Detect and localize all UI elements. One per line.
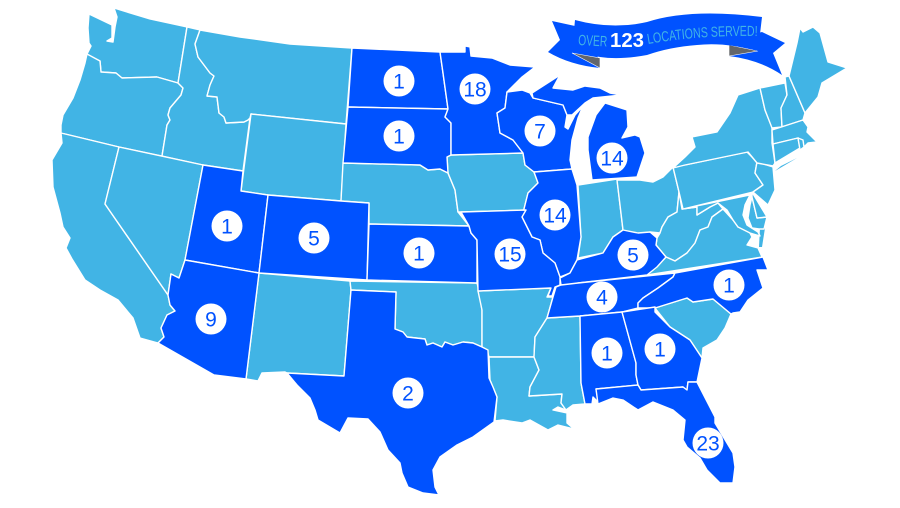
- state: Utah: [185, 165, 268, 273]
- state: New York: [673, 88, 775, 168]
- count: Utah: 1: [221, 216, 233, 238]
- state: Iowa: [447, 153, 538, 217]
- state: Massachusetts: [772, 120, 817, 147]
- count: Kansas: 1: [413, 242, 425, 266]
- state: West Virginia: [656, 192, 723, 261]
- count: Tennessee: [586, 282, 618, 312]
- banner main ribbon: [572, 13, 762, 58]
- state: Oklahoma: [350, 281, 482, 347]
- count: Illinois: 14: [543, 204, 567, 228]
- count: Georgia: [644, 334, 676, 364]
- state: Maine: [789, 27, 847, 113]
- state: Virginia: [647, 209, 763, 275]
- count: Utah: [212, 210, 242, 242]
- count: North Dakota: 1: [393, 70, 405, 94]
- banner text: LOCATIONS SERVED!: [647, 26, 757, 44]
- state: Virginia eastern shore: [759, 228, 765, 247]
- state: Illinois: [522, 169, 581, 277]
- count: Arizona: [196, 304, 226, 334]
- state: Louisiana: [489, 357, 574, 430]
- count: Kentucky: [618, 240, 648, 270]
- count: Missouri: 15: [498, 244, 522, 266]
- state: Nevada: [105, 147, 203, 295]
- state: Arkansas: [478, 288, 553, 357]
- state: North Dakota: [348, 48, 448, 109]
- state: California: [52, 133, 175, 343]
- state: Wyoming: [241, 114, 346, 201]
- count: Florida: 23: [696, 432, 720, 456]
- state: Tennessee: [547, 273, 675, 318]
- count: Minnesota: [460, 74, 490, 104]
- state: South Carolina: [655, 298, 731, 358]
- state: Washington: [87, 8, 187, 83]
- state: Vermont: [760, 83, 787, 128]
- state: Alabama: [580, 312, 638, 404]
- state: Georgia: [622, 307, 702, 390]
- state: Idaho: [162, 27, 250, 171]
- count: Alabama: [592, 338, 622, 368]
- banner right fold: [729, 45, 758, 56]
- state: North Carolina: [638, 257, 768, 314]
- banner right tail: [729, 32, 785, 75]
- state: Delaware: [752, 192, 767, 218]
- banner text: 123: [610, 30, 644, 52]
- state: Mississippi: [529, 316, 585, 410]
- banner text: [578, 26, 757, 52]
- count: Arizona: 9: [205, 308, 217, 332]
- count: Kentucky: 5: [627, 244, 639, 268]
- count: Colorado: 5: [308, 228, 320, 250]
- state: Indiana: [578, 179, 623, 258]
- state: Kansas: [367, 224, 477, 283]
- count: Kansas: [404, 238, 434, 268]
- state: New Mexico: [246, 273, 351, 381]
- state: New York, Long Island: [775, 158, 797, 171]
- state: Missouri: [461, 210, 560, 296]
- location counts: [196, 66, 744, 458]
- banner text: OVER: [578, 32, 608, 51]
- state: Connecticut: [773, 138, 800, 163]
- state: Wisconsin: [497, 90, 583, 172]
- state: Texas: [287, 290, 497, 495]
- count: Texas: [392, 378, 424, 408]
- ribbon banner: [548, 14, 785, 75]
- count: Illinois: [540, 200, 570, 230]
- count: Texas: 2: [402, 382, 414, 406]
- state: Pennsylvania: [673, 152, 763, 209]
- count: Colorado: [298, 222, 330, 254]
- banner left fold: [572, 53, 600, 68]
- state: Nebraska: [341, 163, 469, 226]
- state: Montana: [195, 30, 352, 124]
- count: Wisconsin: [524, 116, 556, 146]
- count: Georgia: 1: [654, 338, 666, 362]
- state: New Jersey: [753, 162, 775, 205]
- count: Florida: [692, 428, 724, 458]
- state: Minnesota: [440, 46, 535, 155]
- count: North Carolina: 1: [723, 274, 735, 298]
- count: South Dakota: [384, 120, 414, 152]
- count: Missouri: [494, 238, 526, 270]
- count: Michigan: [596, 142, 628, 174]
- state: South Dakota: [343, 107, 451, 173]
- count: Minnesota: 18: [463, 78, 487, 102]
- count: South Dakota: 1: [393, 126, 405, 148]
- state: Arizona: [158, 260, 259, 379]
- state: Florida: [596, 382, 735, 483]
- count: Tennessee: 4: [596, 286, 608, 310]
- state: Michigan lower peninsula: [588, 103, 645, 180]
- count: Wisconsin: 7: [534, 120, 546, 144]
- state: Rhode Island: [798, 138, 804, 150]
- state: New Hampshire: [781, 76, 805, 127]
- count: North Dakota: [384, 66, 414, 96]
- state: Maryland: [682, 195, 760, 236]
- state: Oregon: [61, 54, 183, 156]
- banner left tail: [548, 21, 600, 68]
- state: Kentucky: [560, 230, 666, 286]
- state: Ohio: [617, 167, 679, 237]
- count: Alabama: 1: [601, 342, 613, 366]
- count: Michigan: 14: [600, 148, 624, 170]
- state: Maryland eastern shore: [748, 197, 767, 229]
- count: North Carolina: [714, 270, 744, 300]
- state: Michigan upper peninsula: [532, 75, 622, 115]
- state: Colorado: [259, 195, 369, 280]
